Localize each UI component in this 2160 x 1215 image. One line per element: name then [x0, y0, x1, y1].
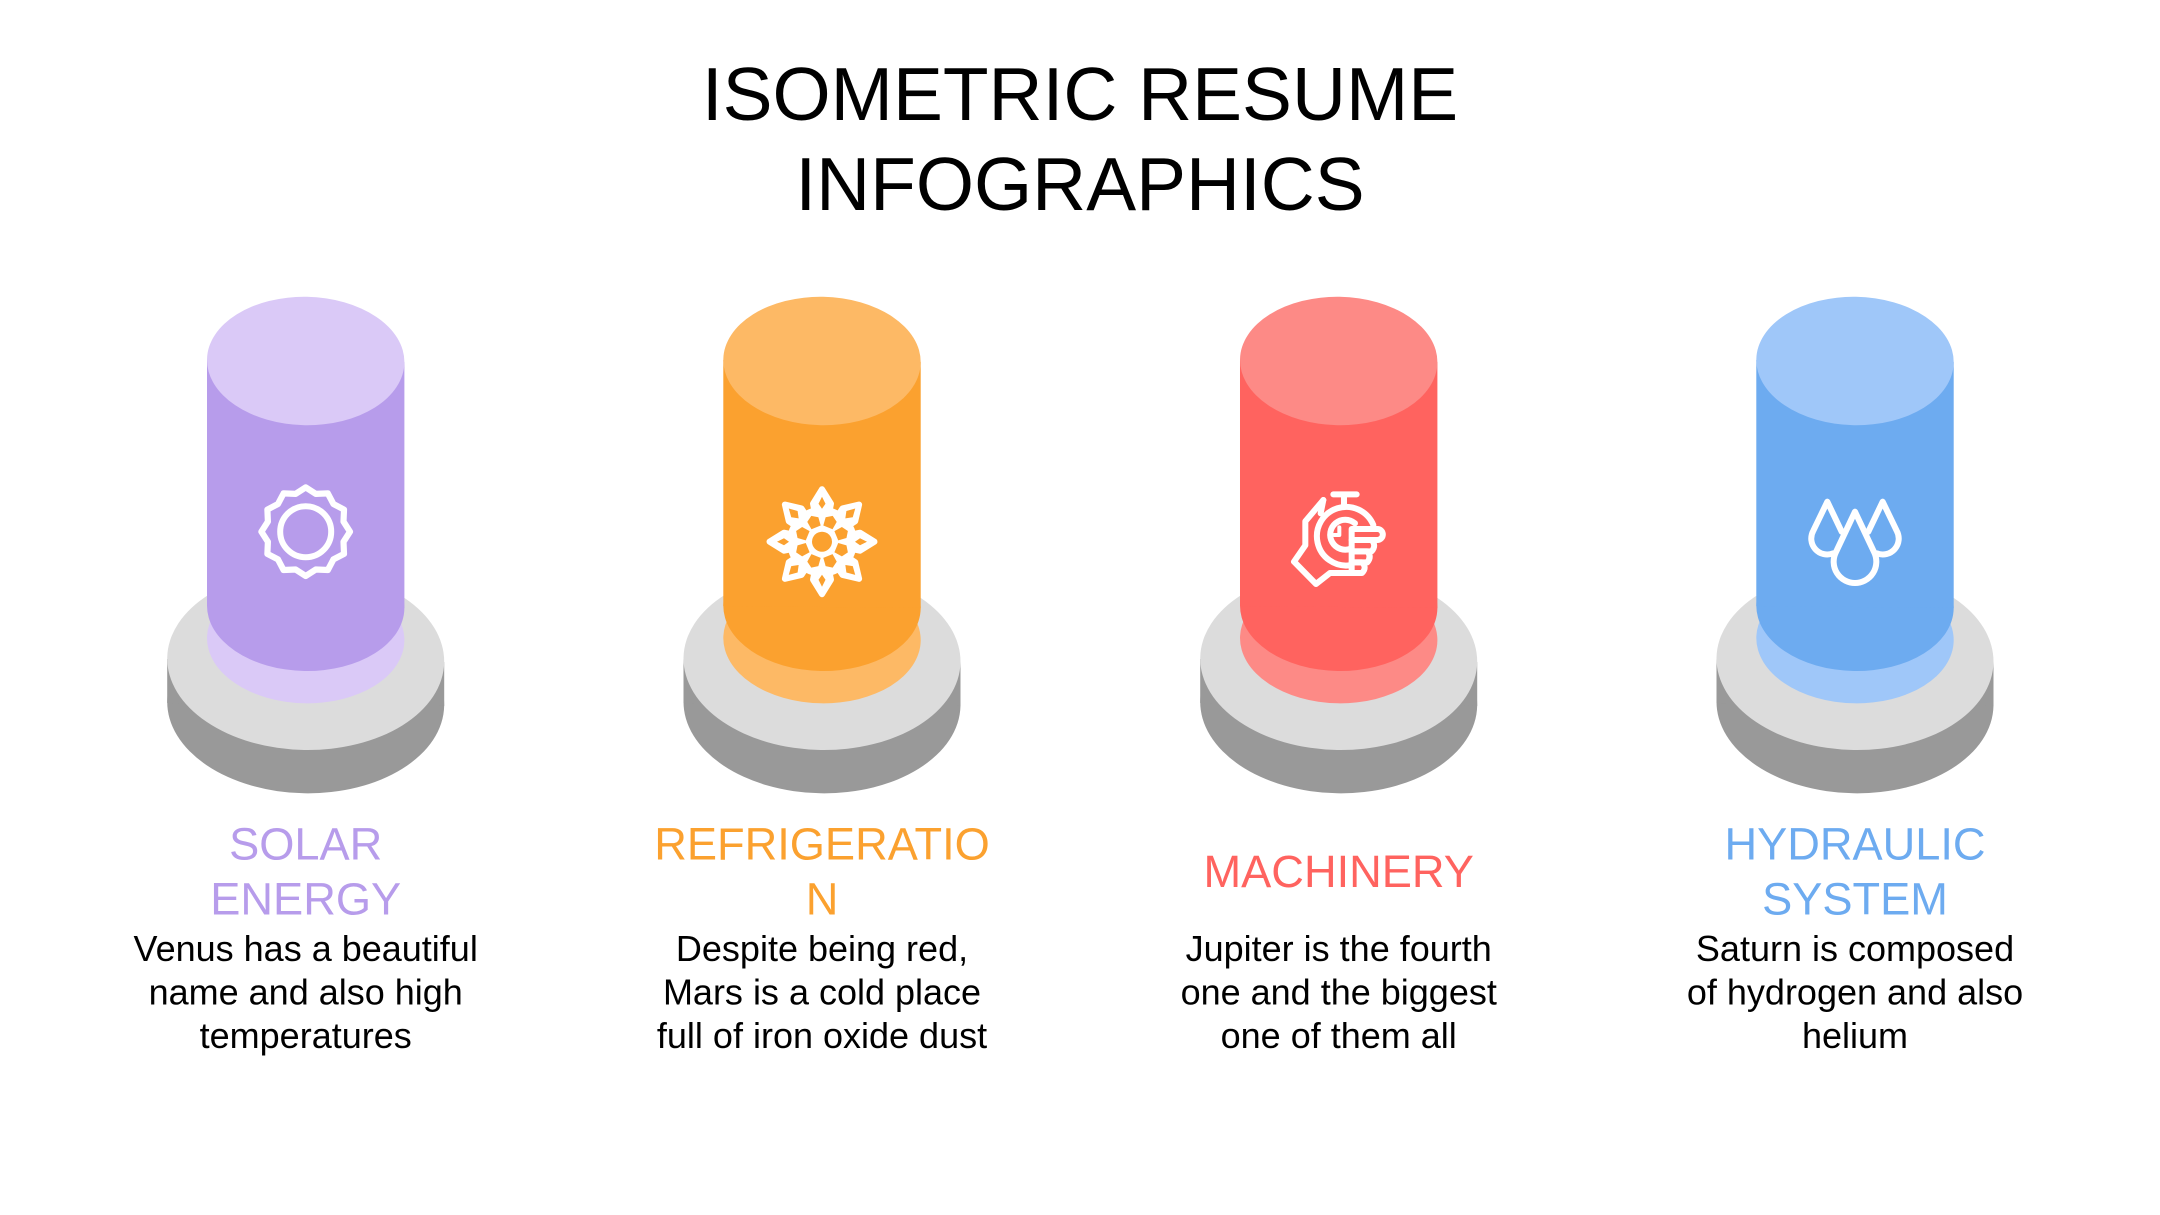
description: [134, 928, 478, 1056]
description: [1687, 928, 2023, 1056]
heading: SYSTEM: [1762, 874, 1948, 924]
base disc: [1199, 568, 1479, 796]
description: Saturn is composed: [1696, 928, 2014, 969]
icon: water drops: [1811, 502, 1899, 583]
cylinder: [722, 295, 922, 705]
heading: [1724, 818, 1986, 924]
description: Mars is a cold place: [663, 972, 981, 1012]
heading: HYDRAULIC: [1724, 818, 1986, 870]
heading: SOLAR: [229, 818, 382, 870]
description: one of them all: [1221, 1015, 1457, 1056]
panel: solar energy: [134, 295, 478, 1056]
description: temperatures: [200, 1015, 412, 1056]
description: [1181, 928, 1497, 1056]
title: [702, 52, 1458, 226]
cylinder: [1239, 295, 1439, 705]
icon: snowflake: [770, 489, 874, 594]
heading: MACHINERY: [1204, 846, 1474, 897]
base disc: [682, 568, 962, 796]
description: name and also high: [149, 972, 463, 1012]
base disc: [166, 568, 446, 796]
title: ISOMETRIC RESUME: [702, 52, 1458, 136]
description: Despite being red,: [676, 928, 968, 969]
cylinder: [206, 295, 406, 705]
description: helium: [1802, 1015, 1908, 1056]
heading: REFRIGERATIO: [654, 818, 990, 870]
description: [657, 928, 987, 1056]
heading: ENERGY: [210, 874, 401, 924]
description: Jupiter is the fourth: [1186, 928, 1492, 969]
cylinder: [1755, 295, 1955, 705]
title: INFOGRAPHICS: [795, 142, 1365, 226]
heading: [654, 818, 990, 924]
base disc: [1715, 568, 1995, 796]
heading: [210, 818, 401, 924]
icon: sun: [261, 487, 350, 576]
panel: hydraulic system: [1687, 295, 2023, 1056]
icon: stopwatch in hand: [1294, 494, 1383, 584]
heading: N: [806, 874, 838, 924]
description: Venus has a beautiful: [134, 928, 478, 969]
description: of hydrogen and also: [1687, 972, 2023, 1012]
description: one and the biggest: [1181, 972, 1497, 1012]
panel: machinery: [1181, 295, 1497, 1056]
panel: refrigeration: [654, 295, 990, 1056]
description: full of iron oxide dust: [657, 1015, 987, 1056]
